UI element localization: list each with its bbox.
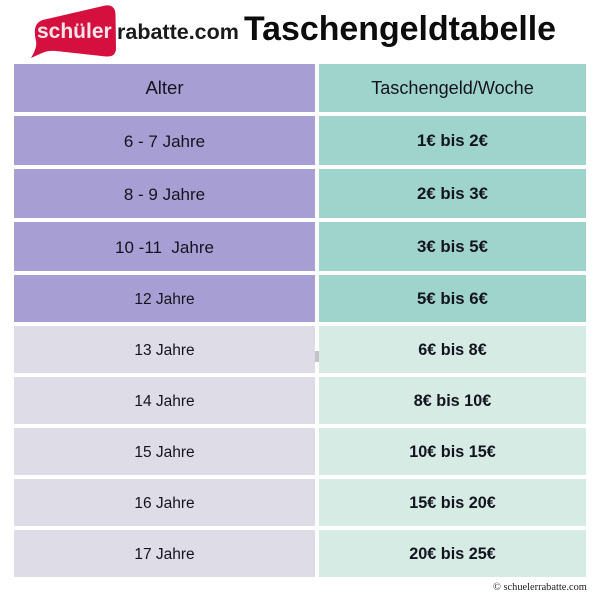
- row age: 12 Jahre: 12 Jahre: [134, 290, 195, 308]
- row age: 16 Jahre: 16 Jahre: [134, 494, 195, 512]
- row age: 8 - 9 Jahre: 8 - 9 Jahre: [124, 184, 205, 204]
- logo: schülerrabatte.com: [31, 5, 239, 58]
- row amount: 2€ bis 3€: 2€ bis 3€: [417, 184, 488, 202]
- row age: 10 -11 Jahre: 10 -11 Jahre: [115, 238, 214, 256]
- row amount: 6€ bis 8€: [319, 326, 586, 373]
- row amount: 20€ bis 25€: 20€ bis 25€: [409, 545, 496, 563]
- row age: 6 - 7 Jahre: 6 - 7 Jahre: [124, 132, 205, 150]
- logo speech bubble: [31, 5, 116, 58]
- row amount: 20€ bis 25€: [319, 530, 586, 577]
- row amount: 10€ bis 15€: [319, 428, 586, 475]
- row age: 13 Jahre: 13 Jahre: [134, 342, 195, 358]
- row age: 12 Jahre: [14, 275, 315, 322]
- header: Taschengeld/Woche: Taschengeld/Woche: [371, 78, 534, 98]
- row amount: 15€ bis 20€: 15€ bis 20€: [409, 494, 496, 512]
- title: Taschengeldtabelle: [244, 10, 556, 48]
- row age: 14 Jahre: 14 Jahre: [134, 392, 195, 410]
- row amount: 5€ bis 6€: 5€ bis 6€: [417, 288, 488, 308]
- row amount: 1€ bis 2€: [319, 116, 586, 165]
- row amount: 2€ bis 3€: [319, 169, 586, 218]
- row amount: 5€ bis 6€: [319, 275, 586, 322]
- row amount: 3€ bis 5€: [319, 222, 586, 271]
- header: Alter: Alter: [145, 77, 184, 98]
- logo word: rabatte.com: rabatte.com: [117, 20, 239, 44]
- row age: 10 -11 Jahre: [14, 222, 315, 271]
- row amount: 8€ bis 10€: [319, 377, 586, 424]
- row age: 13 Jahre: [14, 326, 315, 373]
- row age: 17 Jahre: [14, 530, 315, 577]
- copyright note: © schuelerrabatte.com: [493, 582, 587, 593]
- row amount: 8€ bis 10€: 8€ bis 10€: [414, 392, 491, 410]
- row age: 17 Jahre: 17 Jahre: [134, 546, 195, 562]
- row age: 15 Jahre: 15 Jahre: [134, 444, 195, 460]
- row age: 16 Jahre: [14, 479, 315, 526]
- row age: 15 Jahre: [14, 428, 315, 475]
- row amount: 6€ bis 8€: 6€ bis 8€: [418, 341, 487, 359]
- header: Alter: [14, 64, 315, 112]
- header: Taschengeld/Woche: [319, 64, 586, 112]
- row age: 14 Jahre: [14, 377, 315, 424]
- row age: 6 - 7 Jahre: [14, 116, 315, 165]
- row age: 8 - 9 Jahre: [14, 169, 315, 218]
- row amount: 1€ bis 2€: 1€ bis 2€: [417, 130, 488, 150]
- row amount: 10€ bis 15€: 10€ bis 15€: [409, 443, 496, 461]
- logo word: schüler: schüler: [37, 20, 112, 43]
- row amount: 3€ bis 5€: 3€ bis 5€: [417, 236, 488, 256]
- row amount: 15€ bis 20€: [319, 479, 586, 526]
